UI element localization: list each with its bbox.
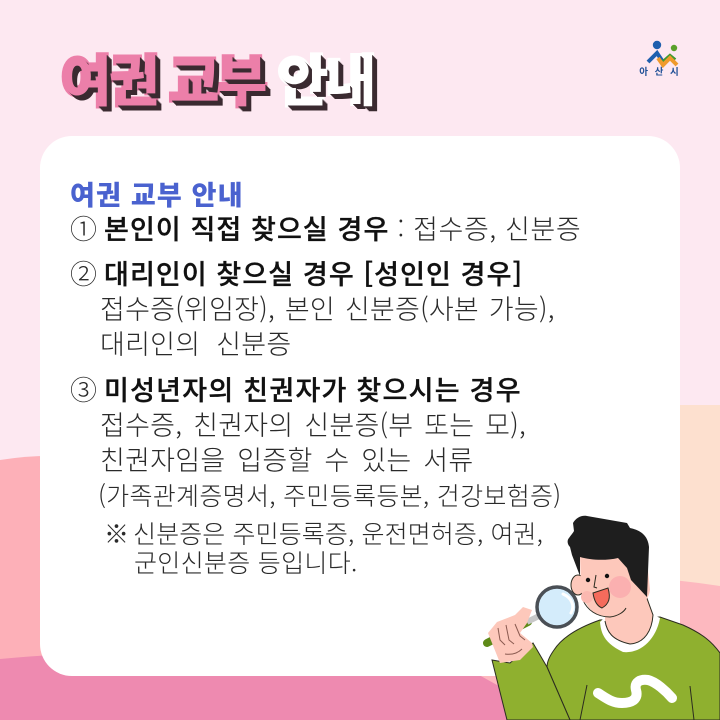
text block: item 3 detail line 1: 접수증, 친권자의 신분증(부 또는 모), bbox=[100, 404, 526, 443]
text block: item 3 document list: (가족관계증명서, 주민등록등본, 건강보험증) bbox=[98, 477, 561, 513]
text block: info heading: 여권 교부 안내 bbox=[70, 174, 244, 213]
hair bbox=[568, 516, 649, 597]
text block: item 2 heading: 대리인이 찾으실 경우 [성인인 경우] bbox=[104, 253, 523, 292]
title: 교부 bbox=[169, 37, 265, 117]
hand bbox=[488, 607, 533, 663]
text block: item 2 detail line 2: 대리인의 신분증 bbox=[100, 323, 291, 362]
text block: ID note line 2: 군인신분증 등입니다. bbox=[134, 544, 358, 580]
title bbox=[61, 37, 378, 117]
text block: ID note line 1: 신분증은 주민등록증, 운전면허증, 여권, bbox=[133, 515, 543, 551]
text block: item 1: 본인이 직접 찾으실 경우 : 접수증, 신분증 bbox=[104, 208, 581, 247]
title: 안내 bbox=[278, 37, 374, 117]
text block: item 3 heading: ③ bbox=[70, 369, 97, 408]
text block: item 3 detail line 2: 친권자임을 입증할 수 있는 서류 bbox=[100, 439, 473, 478]
logo: Asan city bbox=[639, 40, 681, 78]
title: 여권 bbox=[61, 37, 157, 117]
panel: passport issuance info bbox=[40, 136, 680, 676]
logo: Asan city: 아 산 시 bbox=[639, 64, 681, 78]
body and sleeve bbox=[490, 617, 720, 720]
text block: item 2 heading: ② bbox=[70, 253, 97, 292]
neck and collar bbox=[600, 590, 660, 652]
text block: item 3 heading: 미성년자의 친권자가 찾으시는 경우 bbox=[104, 369, 522, 408]
text block: ID note line 1: ※ bbox=[104, 515, 129, 551]
magnifying glass bbox=[487, 587, 577, 643]
head bbox=[568, 516, 650, 617]
text block: item 1: ① bbox=[70, 208, 97, 247]
text block: item 2 detail line 1: 접수증(위임장), 본인 신분증(사본 가능), bbox=[100, 288, 555, 327]
